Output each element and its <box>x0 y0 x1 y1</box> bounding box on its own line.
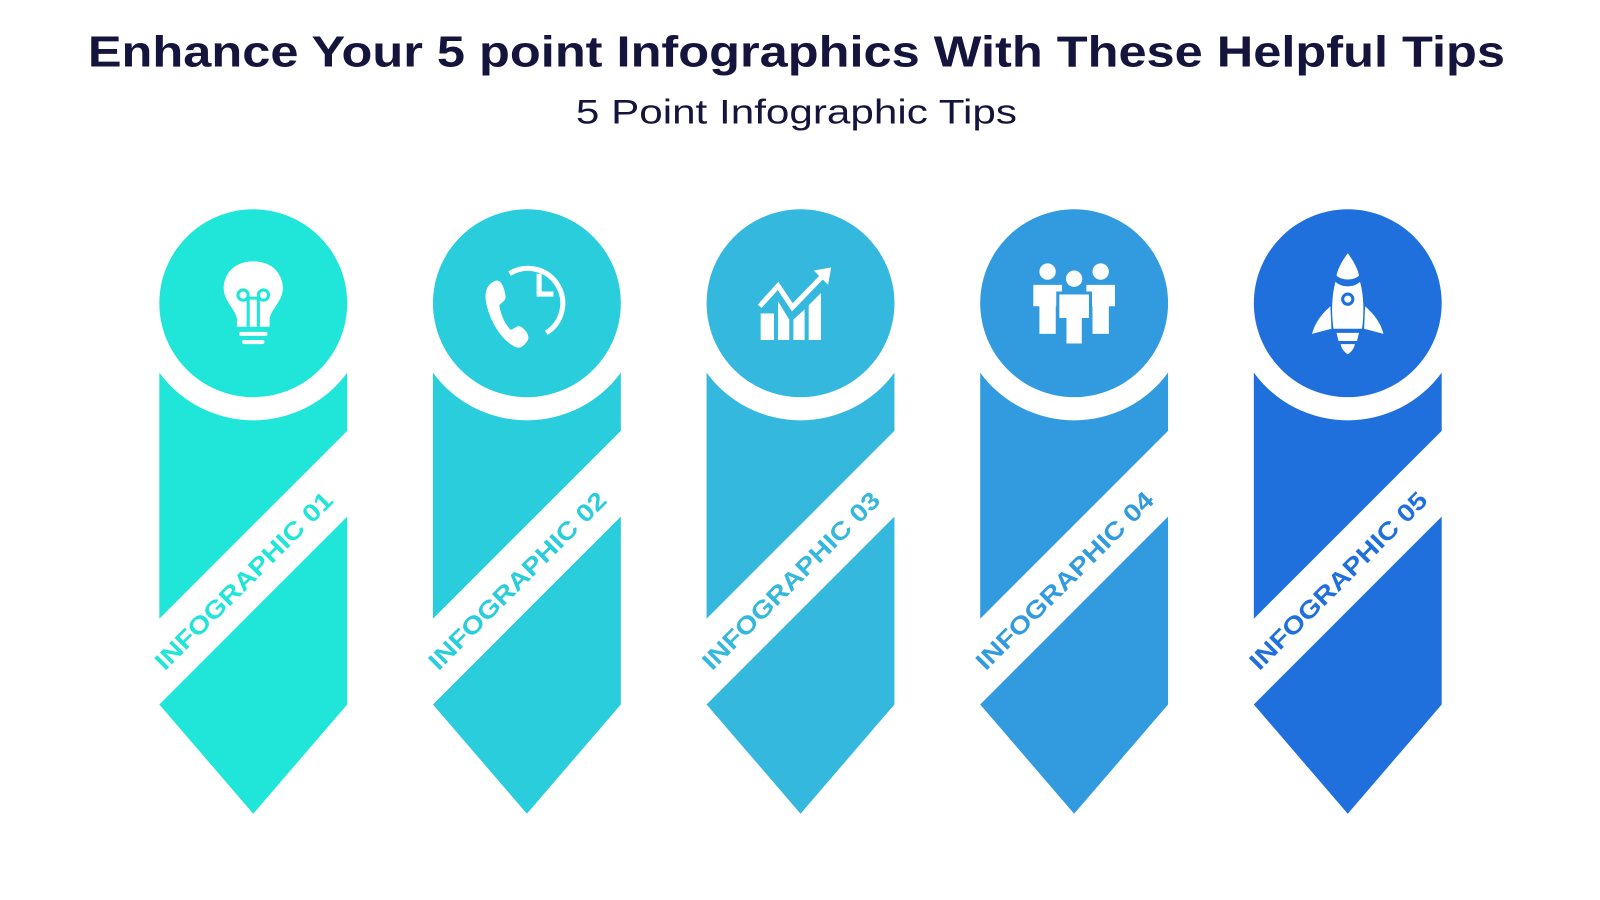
panel: infographic 03 <box>697 209 894 814</box>
label: infographic 03: INFOGRAPHIC 03 <box>697 487 886 676</box>
icon: rocket <box>1312 253 1383 354</box>
subtitle: 5 Point Infographic Tips <box>576 94 1017 132</box>
icon: team <box>1033 263 1115 345</box>
label: infographic 04: INFOGRAPHIC 04 <box>971 487 1160 676</box>
icon: phone clock <box>486 268 563 348</box>
label: infographic 05: INFOGRAPHIC 05 <box>1244 487 1433 676</box>
icon: growth chart <box>760 267 831 340</box>
title: Enhance Your 5 point Infographics With These Helpful Tips <box>88 27 1505 76</box>
panel: infographic 01 <box>150 209 347 814</box>
panel: infographic 02 <box>424 209 621 814</box>
panel: infographic 05 <box>1244 209 1442 814</box>
panel: infographic 04 <box>971 209 1168 814</box>
label: infographic 01: INFOGRAPHIC 01 <box>150 487 339 676</box>
icon: light bulb <box>224 261 283 344</box>
label: infographic 02: INFOGRAPHIC 02 <box>424 487 612 676</box>
